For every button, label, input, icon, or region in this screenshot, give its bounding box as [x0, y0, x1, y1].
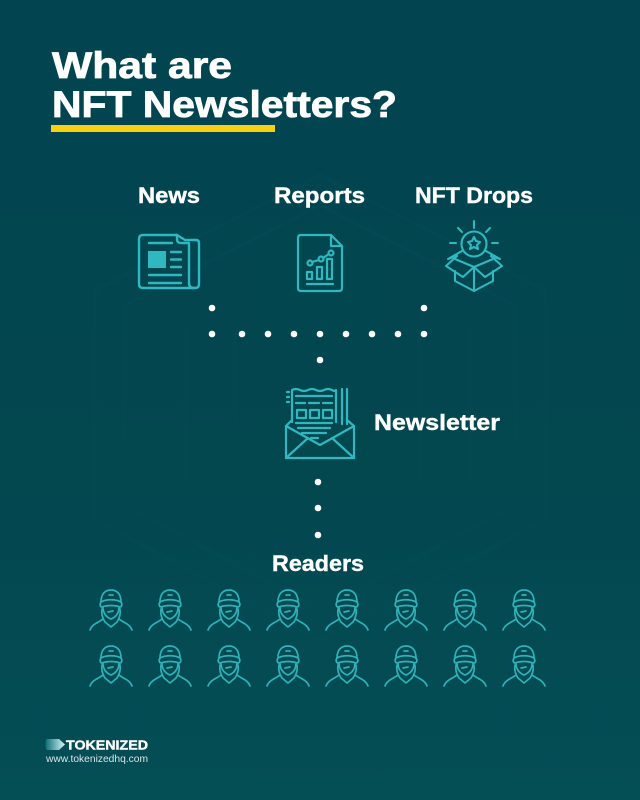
connector dots: sources to newsletter — [209, 305, 427, 363]
label: Readers: Readers — [272, 551, 364, 576]
icon grid: readers — [90, 590, 545, 686]
logo wordmark: TOKENIZED — [66, 738, 148, 752]
icon: newsletter envelope — [286, 389, 354, 458]
label: Reports: Reports — [274, 183, 365, 208]
icon: report document — [298, 235, 342, 291]
title: What are — [52, 45, 232, 86]
faint background pattern — [40, 175, 600, 765]
title: NFT Newsletters? — [52, 84, 397, 125]
label: News: News — [138, 183, 200, 208]
title — [52, 45, 397, 125]
icon: open box with star — [446, 221, 502, 291]
label: NFT Drops: NFT Drops — [415, 183, 533, 208]
title underline — [51, 125, 275, 132]
connector dots: newsletter to readers — [315, 479, 321, 538]
website url: www.tokenizedhq.com — [45, 753, 148, 765]
icon: newspaper — [139, 235, 199, 288]
logo mark — [46, 739, 65, 750]
label: Newsletter: Newsletter — [374, 410, 500, 435]
